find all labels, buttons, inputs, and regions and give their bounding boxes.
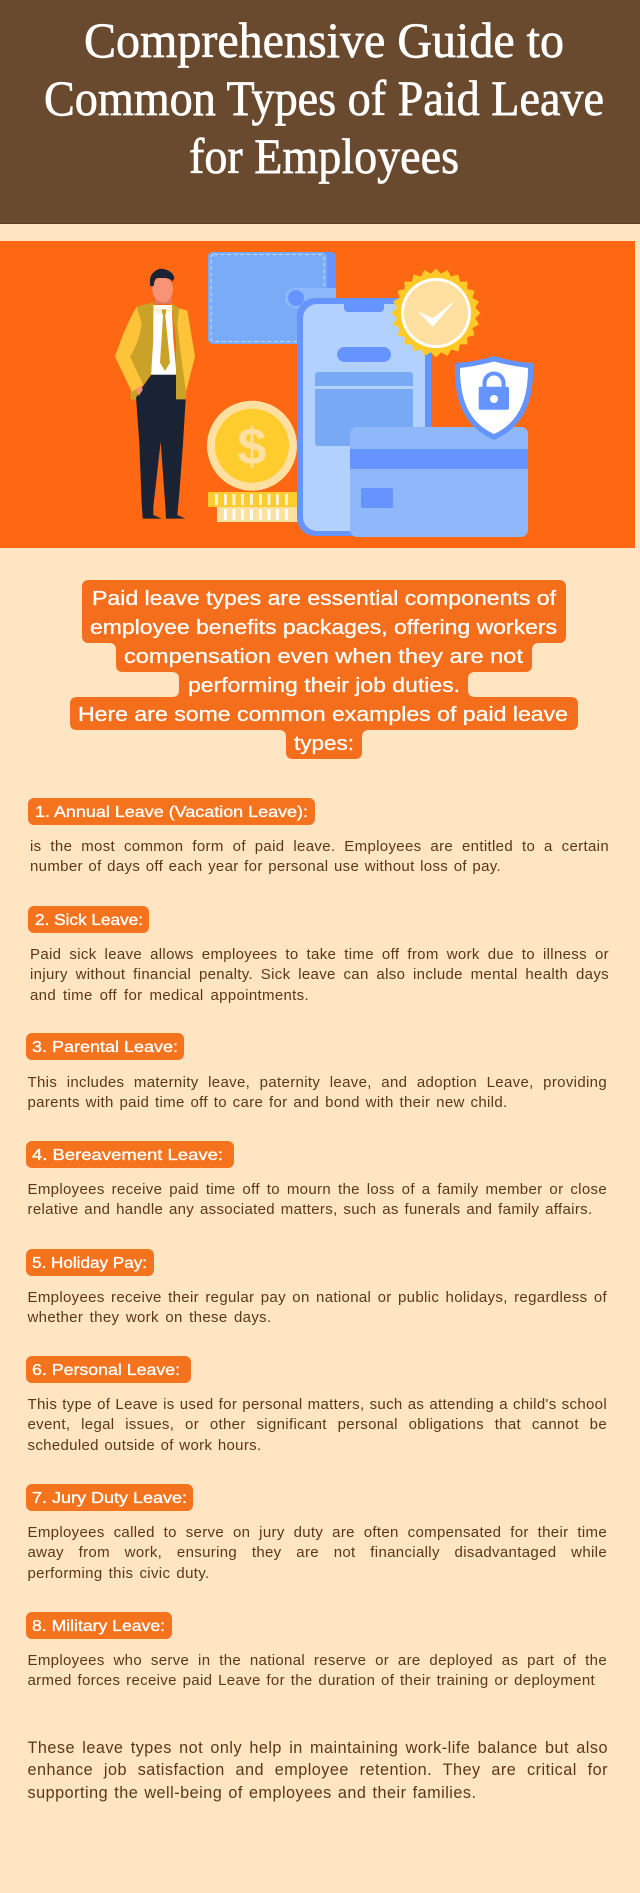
text: bereavement leave: relative and handle any associated matters, such as funerals and family affairs. [28,1201,592,1218]
heading: holiday pay [26,1249,154,1276]
icon: businessman [115,269,195,519]
text: jury duty leave: performing this civic duty. [28,1565,210,1582]
heading: holiday pay: 5. Holiday Pay: [32,1255,147,1272]
text: parental leave: parents with paid time off to care for and bond with their new child. [28,1094,508,1111]
illustration banner [0,241,635,548]
closing text [28,1739,608,1802]
heading: parental leave [26,1033,184,1060]
intro callout: types: [294,733,354,755]
text: military leave [28,1652,607,1689]
text: annual leave [30,838,609,875]
panel: personal leave [26,1356,607,1454]
heading: sick leave: 2. Sick Leave: [35,912,143,929]
text: military leave: armed forces receive paid Leave for the duration of their training or deployment [28,1672,595,1689]
text: holiday pay: Employees receive their regular pay on national or public holidays, regardless of [28,1289,607,1306]
text: military leave: Employees who serve in the national reserve or are deployed as part of the [28,1652,607,1669]
closing text: enhance job satisfaction and employee retention. They are critical for [28,1761,608,1779]
text: annual leave: is the most common form of paid leave. Employees are entitled to a certain [30,838,609,855]
text: sick leave: Paid sick leave allows employees to take time off from work due to illness or [30,946,609,963]
text: jury duty leave: away from work, ensuring they are not financially disadvantaged while [28,1544,607,1561]
panel: bereavement leave [26,1141,607,1218]
intro callout: Paid leave types are essential components of [92,588,557,610]
closing text: supporting the well-being of employees and their families. [28,1784,476,1802]
text: jury duty leave: Employees called to serve on jury duty are often compensated for their time [28,1524,607,1541]
text: holiday pay: whether they work on these days. [28,1309,272,1326]
text: personal leave: This type of Leave is used for personal matters, such as attending a child's school [28,1396,607,1413]
icon: verified badge [392,268,480,358]
text: sick leave: injury without financial penalty. Sick leave can also include mental health days [30,966,609,983]
panel: parental leave [26,1033,607,1111]
intro callout [70,580,578,759]
heading: parental leave: 3. Parental Leave: [32,1039,178,1056]
text: personal leave [28,1396,607,1454]
heading: personal leave [26,1356,191,1383]
heading: military leave [26,1612,172,1639]
intro callout: Here are some common examples of paid leave [78,704,568,726]
heading: sick leave [28,906,149,933]
heading: military leave: 8. Military Leave: [32,1618,165,1635]
icon: coin stack [208,492,298,522]
panel: military leave [26,1612,607,1689]
panel: jury duty leave [26,1484,607,1582]
intro callout: employee benefits packages, offering workers [90,617,557,639]
text: sick leave [30,946,609,1004]
text: sick leave: and time off for medical appointments. [30,987,309,1004]
intro callout: compensation even when they are not [124,646,524,668]
heading: annual leave: 1. Annual Leave (Vacation Leave): [35,804,308,821]
text: annual leave: number of days off each year for personal use without loss of pay. [30,858,501,875]
text: bereavement leave: Employees receive paid time off to mourn the loss of a family member or close [28,1181,607,1198]
title [44,12,604,184]
intro callout: performing their job duties. [188,675,460,697]
title: Comprehensive Guide to [84,12,564,68]
title: for Employees [189,128,459,184]
text: bereavement leave [28,1181,607,1218]
panel: annual leave [28,798,609,875]
heading: bereavement leave [26,1141,234,1168]
title banner [0,0,640,224]
text: parental leave [28,1074,607,1111]
icon: credit card [350,427,528,537]
text: personal leave: scheduled outside of work hours. [28,1437,262,1454]
text: jury duty leave [28,1524,607,1582]
heading: annual leave [28,798,315,825]
closing text: These leave types not only help in maintaining work-life balance but also [28,1739,608,1757]
text: personal leave: event, legal issues, or other significant personal obligations that cannot be [28,1416,607,1433]
heading: jury duty leave: 7. Jury Duty Leave: [32,1490,187,1507]
icon: dollar coin [207,401,297,491]
icon: wallet [208,252,336,344]
icon: security shield [455,356,533,440]
heading: bereavement leave: 4. Bereavement Leave: [32,1147,223,1164]
panel: sick leave [28,906,609,1004]
text: holiday pay [28,1289,607,1326]
icon: dollar coin: $ [238,418,267,476]
title: Common Types of Paid Leave [44,70,604,126]
icon: smartphone [297,298,431,536]
panel: holiday pay [26,1249,607,1326]
heading: jury duty leave [26,1484,193,1511]
text: parental leave: This includes maternity leave, paternity leave, and adoption Leave, providing [28,1074,607,1091]
heading: personal leave: 6. Personal Leave: [32,1362,180,1379]
